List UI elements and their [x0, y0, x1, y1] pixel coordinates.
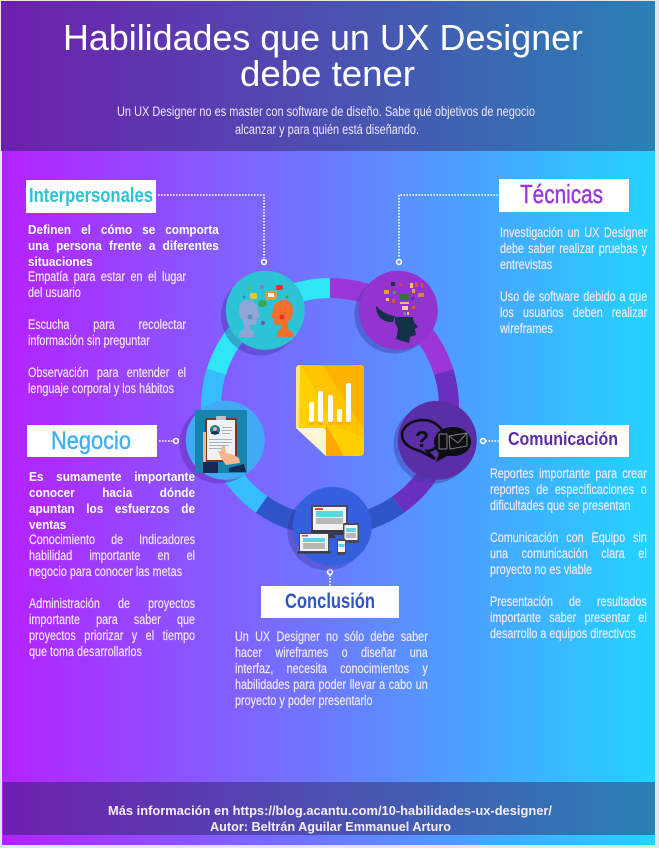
text block: Negocio details: Administración de proyectos: [29, 596, 195, 611]
text block: Conclusión: proyecto y poder presentarlo: [235, 693, 372, 708]
text block: Técnicas: wireframes: [500, 321, 552, 336]
text block: Conclusión: Un UX Designer no sólo debe saber: [235, 629, 428, 644]
title: Habilidades que un UX Designer: [63, 17, 583, 58]
text block: Interpersonales details: [28, 269, 186, 396]
connector: Técnicas: [397, 195, 498, 264]
heading: Conclusión: Conclusión: [285, 590, 375, 613]
heading: Interpersonales: Interpersonales: [29, 185, 153, 207]
text block: Negocio details: [29, 532, 195, 660]
ring chart: [211, 288, 449, 526]
text block: Comunicación: desarrollo a equipos directivos: [490, 626, 636, 641]
text block: Técnicas: debe saber realizar pruebas y: [500, 241, 647, 256]
text block: Negocio details: negocio para conocer las metas: [29, 564, 182, 579]
text block: Conclusión: interfaz, necesita conocimientos y: [235, 661, 428, 676]
text block: Comunicación: Comunicación con Equipo sin: [490, 530, 647, 545]
subtitle: Un UX Designer no es master con software de diseño. Sabe qué objetivos de negocio: [117, 104, 535, 119]
heading: Conclusión: [261, 586, 399, 618]
text block: Interpersonales details: del usuario: [28, 285, 81, 300]
subtitle: alcanzar y para quién está diseñando.: [235, 122, 419, 137]
header band: [1, 1, 655, 151]
text block: Negocio intro: ventas: [29, 518, 66, 532]
text block: Conclusión: [235, 629, 428, 708]
text block: Negocio details: habilidad importante en el: [29, 548, 195, 563]
text block: Interpersonales details: Empatía para estar en el lugar: [28, 269, 186, 284]
text block: Interpersonales intro: Definen el cómo se comporta: [28, 223, 219, 237]
icon: Negocio circle: [180, 401, 265, 484]
heading: Interpersonales: [26, 180, 156, 213]
text block: Interpersonales details: información sin preguntar: [28, 333, 150, 348]
subtitle: [117, 104, 535, 137]
icon: Comunicación circle: ?: [415, 426, 429, 452]
heading: Comunicación: [499, 425, 629, 457]
icon: Interpersonales circle: [221, 271, 305, 356]
text block: Comunicación: dificultades que se presentan: [490, 498, 630, 513]
text block: Interpersonales details: Escucha para recolectar: [28, 317, 186, 332]
heading: Negocio: [27, 425, 157, 457]
connector: Conclusión: [328, 570, 332, 586]
footer text: Más información en https://blog.acantu.com/10-habilidades-ux-designer/: [108, 803, 552, 818]
text block: Comunicación: reportes de especificaciones o: [490, 482, 647, 497]
text block: Interpersonales details: Observación para entender el: [28, 365, 186, 380]
footer text: Autor: Beltrán Aguilar Emmanuel Arturo: [210, 819, 451, 834]
text block: Comunicación: [490, 466, 647, 642]
text block: Interpersonales details: lenguaje corporal y los hábitos: [28, 381, 174, 396]
icon: Técnicas circle: [354, 271, 438, 354]
text block: Técnicas: [500, 225, 648, 336]
connector: Comunicación: [481, 439, 499, 443]
heading: Negocio: Negocio: [51, 427, 131, 455]
text block: Negocio intro: conocer hacia dónde: [29, 486, 195, 500]
connector: Negocio: [159, 439, 178, 443]
heading: Técnicas: Técnicas: [520, 179, 603, 209]
text block: Interpersonales intro: una persona frente a diferentes: [28, 239, 219, 253]
text block: Comunicación: Reportes importante para crear: [490, 466, 647, 481]
icon: central document: [296, 365, 364, 456]
footer text: [108, 803, 552, 834]
heading: Comunicación: Comunicación: [508, 429, 618, 449]
text block: Técnicas: entrevistas: [500, 257, 552, 272]
text block: Técnicas: los usuarios deben realizar: [500, 305, 647, 320]
text block: Conclusión: habilidades para poder llevar a cabo un: [235, 677, 428, 692]
text block: Negocio intro: [29, 470, 195, 532]
text block: Comunicación: Presentación de resultados: [490, 594, 647, 609]
text block: Negocio details: que toma desarrollarlos: [29, 644, 142, 659]
text block: Comunicación: proyecto no es viable: [490, 562, 592, 577]
text block: Negocio details: importante para saber que: [29, 612, 195, 627]
text block: Negocio details: proyectos priorizar y el tiempo: [29, 628, 195, 643]
text block: Comunicación: importante saber presentar el: [490, 610, 647, 625]
icon: Conclusión circle: [288, 487, 372, 570]
title: debe tener: [240, 53, 415, 94]
text block: Técnicas: Uso de software debido a que: [500, 289, 647, 304]
text block: Interpersonales intro: [28, 223, 219, 269]
text block: Técnicas: Investigación un UX Designer: [500, 225, 647, 240]
icon: Comunicación circle: [394, 401, 477, 484]
text block: Negocio intro: Es sumamente importante: [29, 470, 195, 484]
text block: Conclusión: hacer wireframes o diseñar una: [235, 645, 428, 660]
title: [63, 17, 583, 94]
text block: Comunicación: una comunicación clara el: [490, 546, 647, 561]
text block: Negocio intro: apuntan los esfuerzos de: [29, 502, 195, 516]
text block: Interpersonales intro: situaciones: [28, 255, 93, 269]
connector: Interpersonales: [158, 195, 266, 264]
text block: Negocio details: Conocimiento de Indicadores: [29, 532, 195, 547]
footer band: [3, 782, 655, 835]
